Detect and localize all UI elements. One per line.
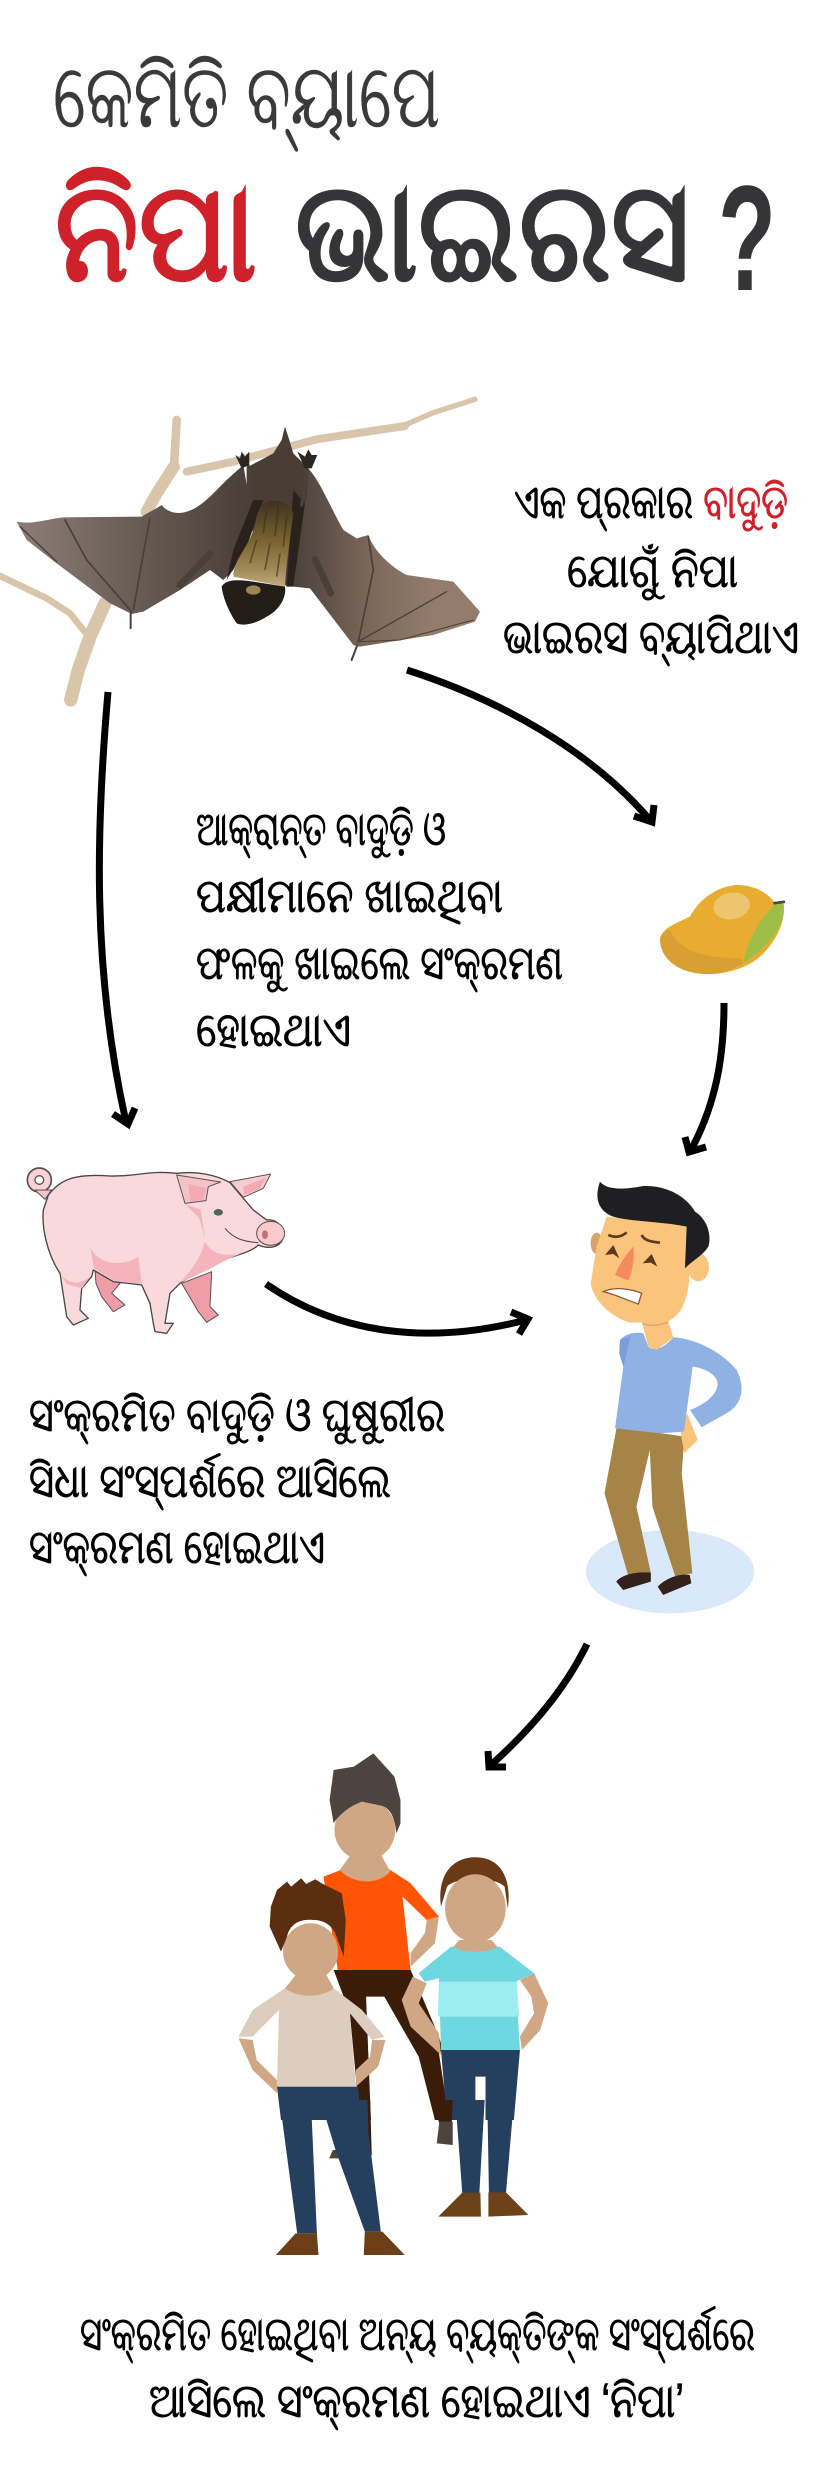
text: contact with other infected people: ଆସିଲେ ସଂକ୍ରମଣ ହୋଇଥାଏ ‘ନିପା’ xyxy=(149,2375,684,2430)
arrow: bat to pig xyxy=(99,692,135,1124)
arrow: pig to man xyxy=(266,1284,528,1334)
arrow: mango to man xyxy=(685,1003,724,1152)
image: sick man xyxy=(586,1182,754,1613)
text: a type of bat spreads Nipah: ଏକ ପ୍ରକାର ବାଦୁଡ଼ି xyxy=(514,476,788,531)
title line: Nipah virus: ? xyxy=(718,154,776,322)
text: a type of bat spreads Nipah xyxy=(503,476,799,666)
arrow: man to other people xyxy=(488,1644,587,1767)
image: mango xyxy=(660,885,785,974)
title line: Nipah virus: ଭାଇରସ xyxy=(295,153,690,310)
title line: Nipah virus: ନିପା xyxy=(55,153,257,310)
text: direct contact with bats and pigs xyxy=(29,1389,445,1576)
image: group of three people xyxy=(238,1753,548,2255)
text: eating fruit touched by bats: ଆକ୍ରାନ୍ତ ବାଦୁଡ଼ି ଓ xyxy=(196,803,446,858)
text: direct contact with bats and pigs: ସିଧା ସଂସ୍ପର୍ଶରେ ଆସିଲେ xyxy=(29,1454,391,1510)
text: eating fruit touched by bats xyxy=(196,803,563,1057)
text: eating fruit touched by bats: ଫଳକୁ ଖାଇଲେ ସଂକ୍ରମଣ xyxy=(196,937,563,992)
image: bat on branch xyxy=(0,399,480,700)
text: a type of bat spreads Nipah: ଯୋଗୁଁ ନିପା xyxy=(567,544,738,600)
text: eating fruit touched by bats: ପକ୍ଷୀମାନେ ଖାଇଥିବା xyxy=(196,870,503,924)
title line: Nipah virus xyxy=(55,153,776,322)
arrow: bat to mango xyxy=(407,670,654,822)
text: direct contact with bats and pigs: ସଂକ୍ରମିତ ବାଦୁଡ଼ି ଓ ଘୁଷୁରୀର xyxy=(29,1389,445,1444)
image: pig xyxy=(27,1168,285,1333)
title line: how it spreads: କେମିତି ବ୍ୟାପେ xyxy=(53,47,440,152)
text: eating fruit touched by bats: ହୋଇଥାଏ xyxy=(196,1004,351,1057)
text: contact with other infected people xyxy=(80,2307,755,2430)
text: direct contact with bats and pigs: ସଂକ୍ରମଣ ହୋଇଥାଏ xyxy=(29,1521,325,1576)
